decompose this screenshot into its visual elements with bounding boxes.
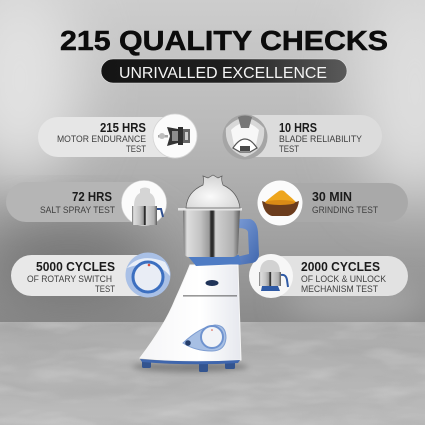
concrete floor: [0, 322, 425, 425]
panel: motor endurance: MOTOR ENDURANCE: [57, 134, 146, 145]
knob panel: [183, 325, 226, 351]
panel: lock and unlock: 2000 CYCLES: [301, 260, 380, 274]
panel: rotary switch: OF ROTARY SWITCH: [27, 274, 112, 285]
icon: blade: [222, 114, 268, 160]
jar handle: [232, 219, 259, 266]
shadow under base: [132, 362, 248, 372]
feet: [142, 360, 235, 372]
base blue trim: [140, 359, 240, 364]
panel: blade reliability: TEST: [279, 144, 299, 155]
subtitle pill: [101, 59, 347, 83]
panel: grinding: [258, 180, 408, 226]
motor base: [140, 265, 241, 361]
jar rim: [178, 208, 242, 210]
panel: lock and unlock: MECHANISM TEST: [301, 284, 378, 295]
icon: motor: [153, 114, 197, 158]
panel: salt spray: [6, 180, 166, 226]
icon: rotary switch: [126, 252, 170, 298]
shadow line: [183, 294, 237, 297]
panel: salt spray: SALT SPRAY TEST: [40, 205, 115, 216]
icon: turmeric bowl: [258, 180, 302, 226]
panel: motor endurance: [38, 114, 197, 158]
panel: grinding: GRINDING TEST: [312, 205, 378, 216]
icon: mixer jar: [249, 254, 293, 298]
panel: rotary switch: 5000 CYCLES: [36, 260, 115, 274]
panel: motor endurance: TEST: [126, 144, 146, 155]
panel: rotary switch: TEST: [95, 284, 115, 295]
panel: motor endurance: 215 HRS: [100, 121, 146, 135]
panel: lock and unlock: OF LOCK & UNLOCK: [301, 274, 387, 285]
product: mixer grinder: [132, 175, 259, 372]
collar: [187, 255, 241, 266]
icon: salt spray jar: [122, 180, 166, 226]
panel: salt spray: 72 HRS: [72, 190, 112, 204]
panel: rotary switch: [11, 252, 170, 298]
steel jar: [183, 209, 240, 257]
panel: blade reliability: 10 HRS: [279, 121, 317, 135]
subtitle pill: UNRIVALLED EXCELLENCE: [119, 65, 327, 82]
panel: blade reliability: BLADE RELIABILITY: [279, 134, 363, 145]
brand badge: [206, 280, 218, 286]
title: 215 QUALITY CHECKS: [60, 25, 388, 56]
panel: lock and unlock: [249, 254, 408, 298]
translucent dome lid: [186, 175, 240, 208]
panel: blade reliability: [222, 114, 382, 160]
panel: grinding: 30 MIN: [312, 190, 352, 204]
